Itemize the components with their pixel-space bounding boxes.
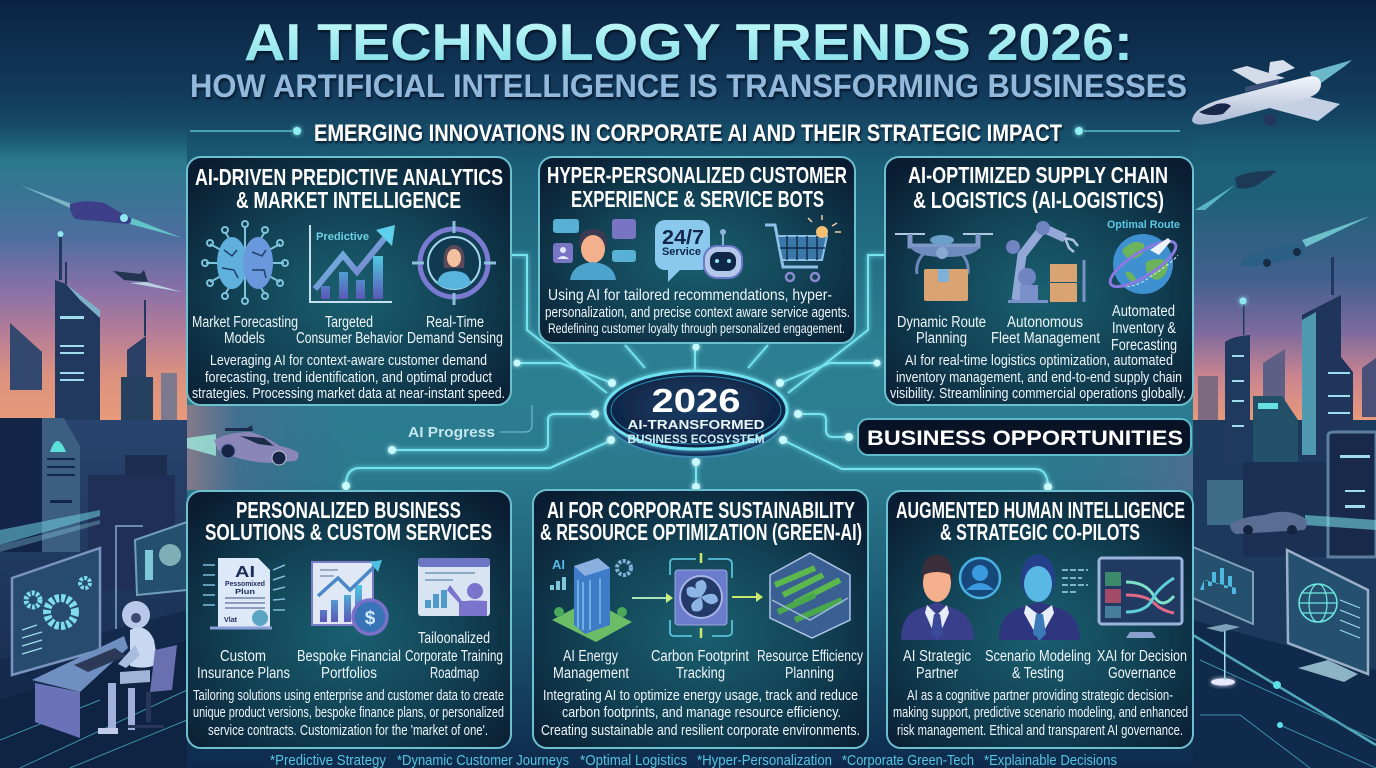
heading: & LOGISTICS (AI-LOGISTICS) xyxy=(913,187,1164,213)
panel: predictive analytics xyxy=(187,157,511,405)
heading: & RESOURCE OPTIMIZATION (GREEN-AI) xyxy=(540,519,862,545)
jet left xyxy=(113,270,182,292)
description: carbon footprints, and manage resource efficiency. xyxy=(562,704,841,721)
icon: vertical farm xyxy=(770,553,850,638)
description: risk management. Ethical and transparent AI governance. xyxy=(897,722,1183,739)
monitor with gears xyxy=(12,548,100,675)
business opportunities label xyxy=(858,419,1191,455)
central hub 2026: BUSINESS ECOSYSTEM xyxy=(628,434,764,446)
heading: & MARKET INTELLIGENCE xyxy=(236,187,461,213)
circuit lines xyxy=(346,255,1048,490)
feature labels: Inventory & xyxy=(1112,320,1177,337)
description xyxy=(541,687,860,739)
icon: custom plan document xyxy=(203,558,285,628)
heading: AI-OPTIMIZED SUPPLY CHAIN xyxy=(908,162,1168,188)
icon: financial portfolio: $ xyxy=(365,608,376,629)
description xyxy=(545,287,850,336)
feature labels: Corporate Training xyxy=(405,648,503,665)
AI Progress label: AI Progress xyxy=(408,425,495,441)
panel: green AI xyxy=(533,490,868,748)
central hub 2026: 2026 xyxy=(652,382,740,419)
feature labels: Models xyxy=(224,330,265,347)
footer keywords xyxy=(270,752,1117,768)
central hub 2026: AI-TRANSFORMED xyxy=(628,418,764,432)
icon: smart building xyxy=(550,557,632,642)
monitor with chart xyxy=(1193,547,1253,632)
heading xyxy=(540,497,862,545)
icon: custom plan document: AI xyxy=(235,564,255,581)
icon: 24/7 service robot: Service xyxy=(662,246,701,258)
icon: target consumer xyxy=(412,221,496,305)
icon: predictive growth chart: Predictive xyxy=(316,231,369,243)
panel: supply chain xyxy=(885,157,1193,405)
description: forecasting, trend identification, and optimal product xyxy=(205,369,493,386)
description: making support, predictive scenario modeling, and enhanced xyxy=(893,704,1188,721)
icon: globe route xyxy=(1104,219,1182,294)
feature labels xyxy=(897,303,1177,354)
robot at desk xyxy=(32,601,177,738)
heading: EXPERIENCE & SERVICE BOTS xyxy=(571,186,824,212)
icon: smart building: AI xyxy=(552,557,565,572)
heading xyxy=(896,497,1185,545)
description: visibility. Streamlining commercial operations globally. xyxy=(890,385,1186,402)
section tagline: EMERGING INNOVATIONS IN CORPORATE AI AND THEIR STRATEGIC IMPACT xyxy=(314,120,1062,147)
icon: 24/7 service robot: 24/7 xyxy=(662,227,704,249)
heading: AI-DRIVEN PREDICTIVE ANALYTICS xyxy=(195,164,503,190)
icon: predictive growth chart xyxy=(310,225,395,302)
right cityscape xyxy=(1193,257,1376,768)
icon: XAI monitor xyxy=(1099,558,1182,638)
description: Creating sustainable and resilient corporate environments. xyxy=(541,722,860,739)
description: personalization, and precise context aware service agents. xyxy=(545,304,850,321)
feature labels: Roadmap xyxy=(430,665,479,682)
description: Leveraging AI for context-aware customer demand xyxy=(210,352,487,369)
feature labels: Dynamic Route xyxy=(897,314,986,331)
feature labels: Real-Time xyxy=(426,314,484,331)
feature labels xyxy=(553,648,863,682)
description: unique product versions, bespoke finance plans, or personalized xyxy=(193,704,504,721)
icon: training roadmap xyxy=(418,558,490,616)
icon: customer with chat bubbles xyxy=(553,219,636,280)
feature labels: & Testing xyxy=(1012,665,1064,682)
feature labels: Governance xyxy=(1108,665,1176,682)
jet right xyxy=(1195,171,1277,210)
description: service contracts. Customization for the 'market of one'. xyxy=(208,722,488,739)
feature labels: Custom xyxy=(220,648,266,665)
heading: HYPER-PERSONALIZED CUSTOMER xyxy=(547,162,847,188)
description: strategies. Processing market data at near-instant speed. xyxy=(192,385,505,402)
feature labels xyxy=(192,314,503,347)
description: Redefining customer loyalty through personalized engagement. xyxy=(548,320,845,336)
icon: 24/7 service robot xyxy=(655,220,742,282)
feature labels: Consumer Behavior xyxy=(296,330,403,347)
flying car left xyxy=(20,185,182,238)
description xyxy=(893,687,1188,739)
feature labels xyxy=(903,648,1187,682)
central hub 2026 xyxy=(605,371,787,457)
heading: & STRATEGIC CO-PILOTS xyxy=(940,519,1140,545)
heading xyxy=(547,162,847,212)
description xyxy=(890,352,1186,402)
feature labels: Market Forecasting xyxy=(192,314,298,331)
left cityscape xyxy=(0,231,187,768)
feature labels: AI Energy xyxy=(563,648,618,665)
feature labels: Carbon Footprint xyxy=(651,648,750,665)
icon: shopping cart xyxy=(765,215,841,281)
description: AI as a cognitive partner providing strategic decision- xyxy=(907,687,1173,704)
description xyxy=(192,352,505,402)
feature labels: Forecasting xyxy=(1111,337,1177,354)
icon: carbon tracking fan xyxy=(632,553,763,638)
icon: globe route: Optimal Route xyxy=(1107,219,1180,231)
icon: custom plan document: Plun xyxy=(235,587,256,596)
flying car right xyxy=(1240,216,1370,267)
panel: personalized solutions xyxy=(187,491,511,748)
spaceship xyxy=(1192,60,1352,126)
panel: augmented intelligence xyxy=(887,491,1193,748)
icon: strategic partner xyxy=(901,555,1000,640)
panel: customer experience xyxy=(539,157,855,343)
flying car lower right xyxy=(1230,512,1376,535)
feature labels: Automated xyxy=(1112,303,1175,320)
feature labels: Tailoonalized xyxy=(418,630,490,647)
feature labels xyxy=(197,630,503,682)
flying car centre xyxy=(187,425,298,465)
feature labels: XAI for Decision xyxy=(1097,648,1187,665)
feature labels: Resource Efficiency xyxy=(757,648,863,665)
heading: SOLUTIONS & CUSTOM SERVICES xyxy=(205,519,492,545)
heading xyxy=(908,162,1168,213)
description: Integrating AI to optimize energy usage, track and reduce xyxy=(543,687,858,704)
heading: AI FOR CORPORATE SUSTAINABILITY xyxy=(547,497,855,523)
monitor with globe xyxy=(1287,550,1368,682)
heading: PERSONALIZED BUSINESS xyxy=(236,497,461,523)
icon: custom plan document: Pessomixed xyxy=(225,579,265,588)
feature labels: Targeted xyxy=(325,314,373,331)
description: inventory management, and end-to-end supply chain xyxy=(896,369,1182,386)
feature labels: Fleet Management xyxy=(991,330,1101,347)
feature labels: Scenario Modeling xyxy=(985,648,1091,665)
icon: brain xyxy=(202,221,288,304)
description: AI for real-time logistics optimization, automated xyxy=(905,352,1173,369)
feature labels: Partner xyxy=(916,665,958,682)
icon: delivery drone xyxy=(895,234,993,301)
monitor small xyxy=(135,522,187,595)
main title: AI TECHNOLOGY TRENDS 2026: xyxy=(244,14,1133,72)
feature labels: Autonomous xyxy=(1007,314,1083,331)
feature labels: Portfolios xyxy=(321,665,377,682)
AI Progress label xyxy=(408,405,532,441)
description xyxy=(193,687,504,739)
feature labels: Bespoke Financial xyxy=(297,648,401,665)
feature labels: Insurance Plans xyxy=(197,665,290,682)
feature labels: Management xyxy=(553,665,630,682)
description: Tailoring solutions using enterprise and customer data to create xyxy=(193,687,504,704)
circuit nodes xyxy=(342,344,1052,491)
feature labels: Demand Sensing xyxy=(407,330,503,347)
feature labels: AI Strategic xyxy=(903,648,971,665)
heading: AUGMENTED HUMAN INTELLIGENCE xyxy=(896,497,1185,523)
heading xyxy=(205,497,492,545)
subtitle: HOW ARTIFICIAL INTELLIGENCE IS TRANSFORMING BUSINESSES xyxy=(190,68,1187,104)
icon: robotic arm xyxy=(1006,221,1084,303)
business opportunities label: BUSINESS OPPORTUNITIES xyxy=(867,426,1183,450)
description: Using AI for tailored recommendations, hyper- xyxy=(548,287,832,304)
heading xyxy=(195,164,503,213)
feature labels: Planning xyxy=(916,330,967,347)
feature labels: Tracking xyxy=(676,665,725,682)
icon: custom plan document: Vlat xyxy=(224,615,237,624)
icon: scenario modeling person xyxy=(999,554,1088,640)
feature labels: Planning xyxy=(785,665,834,682)
icon: financial portfolio xyxy=(312,560,387,634)
